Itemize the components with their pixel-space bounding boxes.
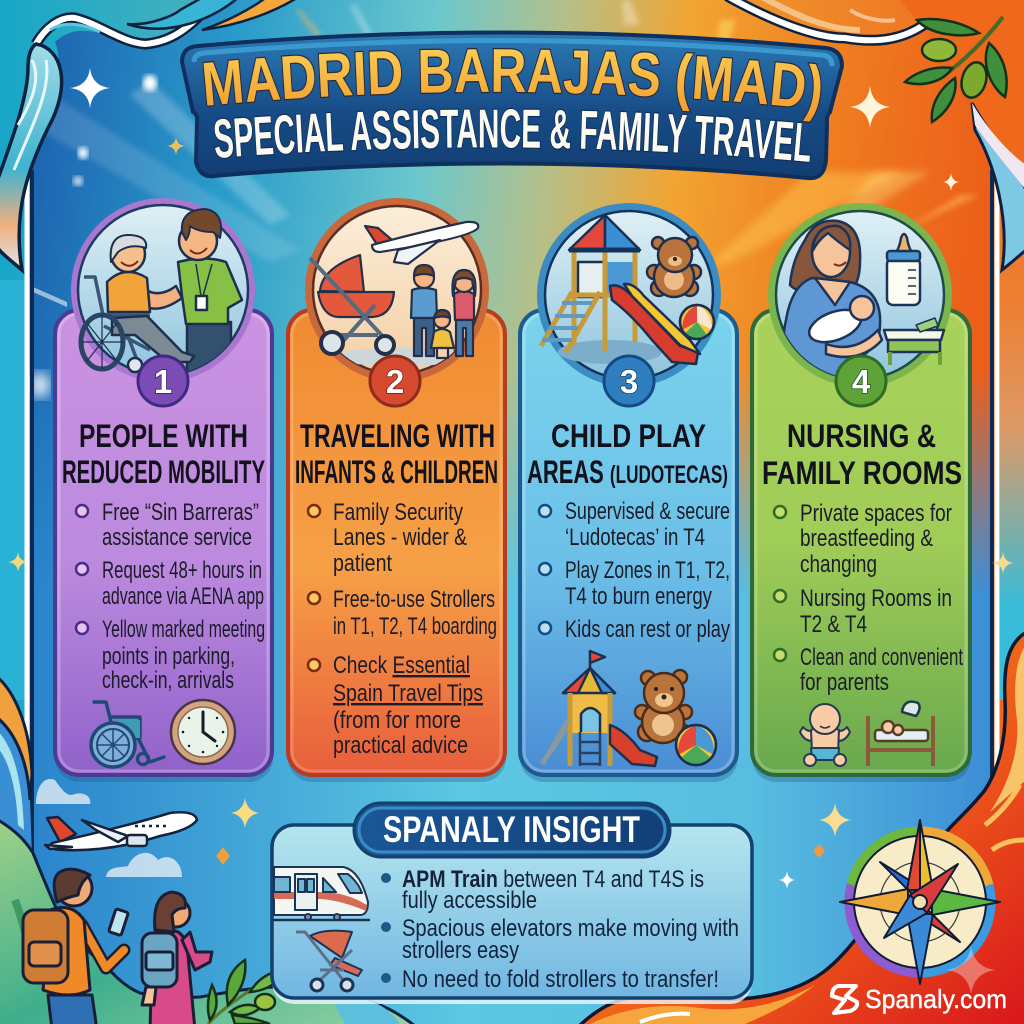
icon: olive branch bbox=[905, 17, 1007, 122]
heading bbox=[62, 418, 265, 490]
bullet list: Free-to-use Strollers bbox=[333, 586, 495, 613]
insight heading pill bbox=[354, 803, 670, 857]
bullet list: Play Zones in T1, T2, bbox=[565, 557, 730, 584]
bottom-left landscape bbox=[0, 818, 420, 1024]
top-left ribbon frame bbox=[0, 0, 300, 860]
insight heading pill: SPANALY INSIGHT bbox=[383, 809, 640, 850]
title line 2: SPECIAL ASSISTANCE & FAMILY TRAVEL bbox=[214, 108, 811, 164]
heading bbox=[762, 418, 962, 491]
number badge 1 bbox=[138, 356, 188, 406]
number badge 4 bbox=[836, 356, 886, 406]
bullet list: assistance service bbox=[102, 524, 252, 551]
top-right ribbon frame bbox=[727, 0, 1024, 800]
logo: Spanaly.com: Spanaly.com bbox=[865, 984, 1007, 1014]
bullet list: Kids can rest or play bbox=[565, 616, 730, 643]
light beams bbox=[31, 0, 980, 398]
bullet list: Free “Sin Barreras” bbox=[102, 499, 259, 526]
bullet list: Request 48+ hours in bbox=[102, 557, 262, 584]
panel: traveling with infants and children bbox=[288, 198, 506, 782]
bullet list: in T1, T2, T4 boarding bbox=[333, 613, 497, 640]
icon: small playground bbox=[542, 651, 657, 766]
heading: INFANTS & CHILDREN bbox=[295, 454, 498, 490]
bullet list: practical advice bbox=[333, 732, 468, 759]
heading: FAMILY ROOMS bbox=[762, 455, 962, 491]
bullet list: for parents bbox=[800, 669, 889, 696]
bullet list: Family Security bbox=[333, 499, 463, 526]
heading: CHILD PLAY bbox=[551, 418, 706, 454]
heading bbox=[295, 418, 498, 490]
panel: people with reduced mobility bbox=[55, 198, 273, 782]
icon: airplane bbox=[45, 812, 197, 850]
bullet list: advance via AENA app bbox=[102, 583, 264, 610]
number badge 3 bbox=[604, 356, 654, 406]
heading: REDUCED MOBILITY bbox=[62, 454, 265, 490]
heading: TRAVELING WITH bbox=[300, 418, 495, 454]
illustration: traveller woman bbox=[142, 892, 212, 1024]
bullet list: Private spaces for bbox=[800, 500, 952, 527]
number badge 2 bbox=[370, 356, 420, 406]
insight list: No need to fold strollers to transfer! bbox=[402, 966, 719, 993]
icon: clock bbox=[171, 700, 235, 764]
panel: child play areas bbox=[520, 203, 738, 782]
insight list: fully accessible bbox=[402, 887, 537, 914]
bullet list: points in parking, bbox=[102, 643, 235, 670]
clouds bbox=[36, 779, 182, 877]
bullet list: Yellow marked meeting bbox=[102, 616, 265, 643]
bullet list: T4 to burn energy bbox=[565, 583, 712, 610]
insight list bbox=[381, 866, 739, 993]
icon: compass bbox=[840, 820, 1000, 984]
bullet list: Check Essential bbox=[333, 652, 470, 679]
bullet list: check-in, arrivals bbox=[102, 667, 234, 694]
icon: wheelchair bbox=[91, 702, 164, 767]
insight list: strollers easy bbox=[402, 937, 519, 964]
bullet list: (from for more bbox=[333, 707, 461, 734]
heading: PEOPLE WITH bbox=[79, 418, 248, 454]
number badge 4: 4 bbox=[852, 363, 871, 400]
bullet list: patient bbox=[333, 550, 392, 577]
bullet list bbox=[539, 498, 730, 643]
number badge 1: 1 bbox=[154, 363, 172, 400]
panel: nursing and family rooms bbox=[752, 203, 971, 782]
bullet list: ‘Ludotecas’ in T4 bbox=[565, 524, 705, 551]
bullet list bbox=[308, 499, 497, 759]
bullet list: changing bbox=[800, 551, 877, 578]
icon: baby bbox=[800, 704, 850, 766]
title banner bbox=[180, 30, 844, 180]
icon: stroller bbox=[296, 931, 362, 991]
bullet list: breastfeeding & bbox=[800, 525, 933, 552]
number badge 2: 2 bbox=[386, 363, 404, 400]
icon: stroller, plane and family bbox=[305, 198, 489, 382]
bullet list: Supervised & secure bbox=[565, 498, 730, 525]
icon: playground and teddy bear bbox=[537, 203, 721, 387]
decorative sparkles bbox=[8, 68, 1014, 889]
panel: spanaly insight bbox=[272, 803, 752, 1004]
icon: olive sprig bbox=[208, 960, 285, 1024]
icon: mother nursing, bottle and changing table bbox=[768, 203, 952, 387]
title line 1: MADRID BARAJAS (MAD) bbox=[202, 48, 822, 123]
bottom-right flame wave bbox=[575, 630, 1024, 1024]
icon: crib and lamp bbox=[868, 702, 933, 766]
bottom-left ribbon bbox=[0, 675, 32, 857]
icon: wheelchair user and helper bbox=[71, 198, 255, 382]
heading: NURSING & bbox=[787, 418, 936, 454]
icon: APM train bbox=[272, 867, 370, 920]
bullet list bbox=[76, 499, 265, 694]
insight list: APM Train between T4 and T4S is bbox=[402, 866, 704, 893]
icon: beach ball bbox=[676, 725, 716, 765]
icon: teddy bear bbox=[635, 670, 692, 743]
bullet list bbox=[774, 500, 963, 696]
watermark sparkle bbox=[947, 946, 995, 994]
bullet list: T2 & T4 bbox=[800, 611, 867, 638]
bullet list: Lanes - wider & bbox=[333, 524, 467, 551]
number badge 3: 3 bbox=[620, 363, 638, 400]
bullet list: Spain Travel Tips bbox=[333, 680, 483, 707]
bullet list: Nursing Rooms in bbox=[800, 585, 952, 612]
heading: AREAS (LUDOTECAS) bbox=[527, 454, 728, 490]
illustration: traveller man bbox=[23, 869, 128, 1024]
heading bbox=[527, 418, 728, 490]
insight list: Spacious elevators make moving with bbox=[402, 915, 739, 942]
